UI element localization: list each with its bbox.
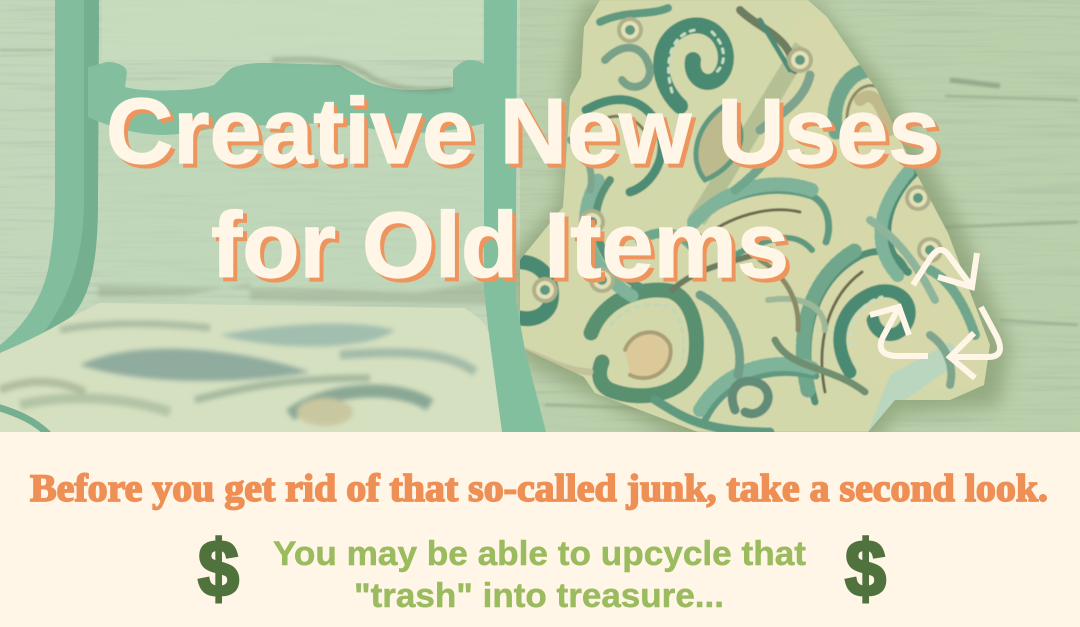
title [106,79,944,301]
title: for Old Items [211,193,789,297]
hero photo: chair and paisley fabric on a wood wall [0,0,1080,445]
chair right post [484,0,546,432]
title: Creative New Uses [106,79,940,183]
chair crest rail [88,60,486,135]
lower cream panel [0,432,1080,627]
title: for Old Items [215,197,793,301]
chair [0,0,546,436]
chair seat [0,300,530,432]
title: Creative New Uses [110,83,944,187]
teal paisley curls [520,8,975,432]
subtitle: Before you get rid of that so-called junk, take a second look. [30,467,1048,510]
icon: right dollar sign: $ [845,524,886,613]
chair crest shadow [272,59,452,90]
chair left post [0,0,99,358]
tagline: You may be able to upcycle that [273,535,806,573]
tagline: "trash" into treasure... [354,577,724,615]
paisley fabric [500,0,1020,432]
wood wall background [0,0,1080,432]
tagline [273,535,806,615]
fabric shadow [510,0,1010,445]
icon: recycle arrows [870,250,1000,378]
icon: left dollar sign: $ [198,524,239,613]
ferns [690,190,829,242]
